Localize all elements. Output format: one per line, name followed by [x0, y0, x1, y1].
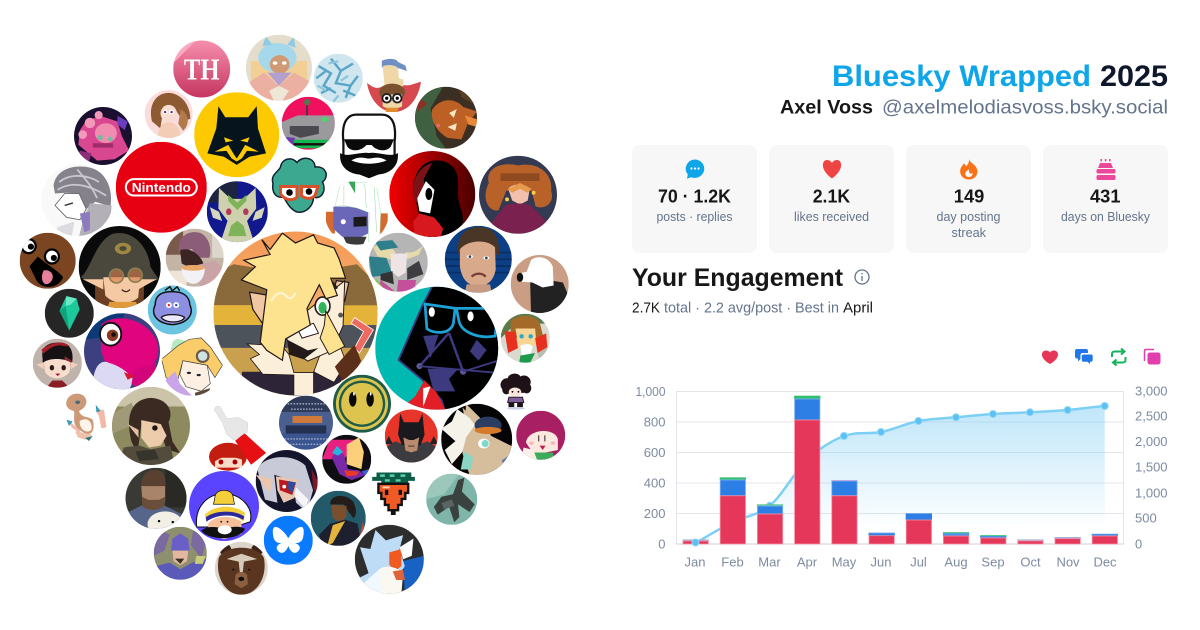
avatar: dark dragon on teal — [426, 474, 477, 525]
panel: days on Bluesky — [1043, 145, 1168, 253]
avatar: girl with brown hair — [145, 90, 193, 138]
left axis labels — [636, 384, 666, 552]
right axis labels: 0 — [1135, 536, 1142, 552]
bar: Feb — [720, 477, 746, 544]
icon: chat bubble — [686, 160, 704, 179]
avatar: TH logo: TH — [184, 52, 220, 86]
avatar: white dog figure — [511, 255, 569, 313]
bar: Apr — [794, 396, 820, 544]
right axis labels: 3,000 — [1135, 384, 1168, 398]
month labels — [685, 554, 1117, 570]
bar: Oct — [1017, 539, 1044, 544]
grid lines — [676, 391, 1124, 544]
title: 2025 — [1100, 60, 1168, 93]
left axis labels: 200 — [644, 506, 666, 521]
avatar: man in yellow shirt — [311, 491, 366, 546]
legend icons — [1042, 348, 1160, 366]
panel: days on Bluesky: 431 — [1090, 186, 1120, 206]
engagement summary: total · 2.2 avg/post · Best in — [664, 300, 839, 316]
panel: likes received: 2.1K — [813, 186, 851, 206]
avatar: green cat plush — [207, 181, 268, 242]
avatar: bearded logo — [340, 115, 398, 178]
icon: legend reposts — [1112, 348, 1126, 366]
panel: day posting streak: streak — [952, 226, 987, 240]
avatar: pointing hand sticker — [209, 406, 266, 471]
avatar: pink octopus — [74, 107, 132, 165]
avatar: blonde elf main portrait — [214, 232, 378, 397]
bar: Aug — [943, 532, 969, 544]
bar: Jun — [868, 532, 895, 544]
month labels: Dec — [1093, 554, 1117, 570]
avatar: grey sketch portrait — [54, 166, 112, 236]
avatar: magenta hair character — [516, 411, 565, 460]
avatar: lalafell portrait — [112, 387, 190, 465]
avatar: witch with hat — [79, 226, 161, 308]
month labels: Nov — [1056, 554, 1080, 570]
bar: May — [831, 480, 858, 544]
month labels: Mar — [758, 554, 781, 570]
right axis labels: 1,000 — [1135, 486, 1168, 500]
bar: Jan — [682, 539, 709, 544]
right axis labels: 500 — [1135, 510, 1157, 526]
avatar: Nintendo logo — [116, 142, 207, 233]
icon: info — [855, 270, 869, 284]
avatar: watercolor girl — [246, 35, 312, 101]
avatar: purple dino — [148, 286, 197, 334]
avatar: girl in red — [389, 151, 475, 237]
avatar: green gem — [45, 289, 94, 338]
panel: posts and replies: 70 · 1.2K — [658, 186, 731, 206]
month labels: May — [832, 554, 857, 570]
avatar: Bluesky logo — [264, 516, 313, 565]
icon: flame — [960, 159, 977, 180]
icon: legend replies — [1075, 349, 1093, 364]
panel: day posting streak: 149 — [954, 186, 984, 206]
month labels: Jun — [871, 554, 891, 570]
avatar: TH logo — [173, 40, 230, 98]
avatar: white-blue fox girl — [355, 525, 424, 594]
January line point — [692, 539, 699, 546]
month labels: Aug — [944, 554, 968, 570]
bar: Jul — [906, 513, 932, 544]
cumulative area — [696, 406, 1105, 544]
icon: legend quotes — [1144, 350, 1160, 364]
chart: monthly engagement bars with cumulative line — [636, 384, 1168, 570]
avatar: pixel carrot — [372, 472, 415, 515]
line points — [766, 402, 1108, 509]
month labels: Apr — [797, 554, 818, 570]
right axis labels: 2,500 — [1135, 408, 1168, 424]
avatar: Batman — [385, 410, 438, 462]
panel: likes received: likes received — [794, 210, 869, 224]
icon: legend heart — [1042, 350, 1058, 364]
bar: Nov — [1054, 537, 1081, 544]
panel: posts and replies: posts · replies — [656, 210, 732, 224]
panel: likes received — [769, 145, 894, 253]
month labels: Oct — [1020, 554, 1041, 570]
avatar: glasses character — [367, 59, 421, 112]
month labels: Sep — [981, 554, 1005, 570]
engagement summary: April — [843, 300, 873, 316]
engagement summary: 2.7K — [632, 300, 660, 316]
heading: Your Engagement: Your Engagement — [632, 265, 843, 292]
avatar: green shell creature — [272, 158, 326, 212]
avatar: crowded arena — [279, 396, 333, 450]
right axis labels — [1135, 384, 1168, 552]
avatar: chibi dark hair — [33, 339, 82, 388]
panel: days on Bluesky: days on Bluesky — [1061, 210, 1151, 224]
avatar: curly hair girl — [479, 156, 557, 234]
right axis labels: 1,500 — [1135, 460, 1168, 474]
panel: day posting streak — [906, 145, 1031, 253]
avatar: helmeted fighter — [154, 527, 207, 580]
avatar: captain on purple — [189, 471, 259, 541]
avatar: man with grimace — [445, 226, 512, 293]
month labels: Feb — [721, 554, 744, 570]
bar: Dec — [1092, 534, 1118, 544]
avatar: yellow smiley button — [333, 375, 391, 433]
avatar: orc — [415, 87, 477, 149]
avatar: Nintendo logo: Nintendo — [132, 180, 191, 195]
bar: Mar — [757, 504, 783, 544]
left axis labels: 600 — [644, 445, 666, 460]
avatar: Darth Vader with glasses — [375, 284, 501, 413]
left axis labels: 400 — [644, 476, 666, 490]
avatar: figure with teacup — [166, 229, 224, 287]
avatar: neon dragon — [322, 435, 371, 484]
avatar: E.T. figure — [66, 394, 106, 441]
bar: Sep — [980, 535, 1006, 544]
avatar: pale green hair character — [325, 181, 389, 245]
avatar: horse with goggles — [441, 404, 512, 475]
month labels: Jan — [685, 554, 705, 570]
title: Bluesky Wrapped — [832, 60, 1091, 93]
avatar: christmas character — [501, 314, 550, 363]
stacked bars — [682, 396, 1118, 544]
month labels: Jul — [910, 554, 927, 570]
panel: day posting streak: day posting — [936, 210, 1001, 224]
avatar: black fox on yellow — [194, 92, 279, 177]
avatar: brown bear — [215, 542, 268, 595]
user name and handle: Axel Voss — [780, 96, 873, 118]
avatar: white haired elf — [256, 450, 318, 512]
icon: heart — [823, 160, 841, 178]
cumulative line — [696, 406, 1105, 543]
avatar: magenta yoshi — [84, 313, 160, 389]
left axis labels: 800 — [644, 414, 666, 430]
avatar: afro kid — [501, 374, 531, 410]
avatar: blue texture — [314, 54, 363, 103]
icon: cake — [1096, 159, 1116, 180]
avatar: man with white dog — [126, 468, 186, 529]
avatar cluster — [20, 35, 569, 595]
panel: posts and replies — [632, 145, 757, 253]
avatar: brown cartoon dog — [20, 233, 76, 289]
right axis labels: 2,000 — [1135, 434, 1168, 449]
avatar: armored monster figure — [369, 233, 428, 292]
avatar: robot on pink — [282, 97, 335, 150]
user name and handle: @axelmelodiasvoss.bsky.social — [882, 96, 1168, 118]
left axis labels: 1,000 — [636, 384, 666, 399]
left axis labels: 0 — [658, 536, 666, 552]
avatar: blonde goggles — [162, 335, 222, 396]
